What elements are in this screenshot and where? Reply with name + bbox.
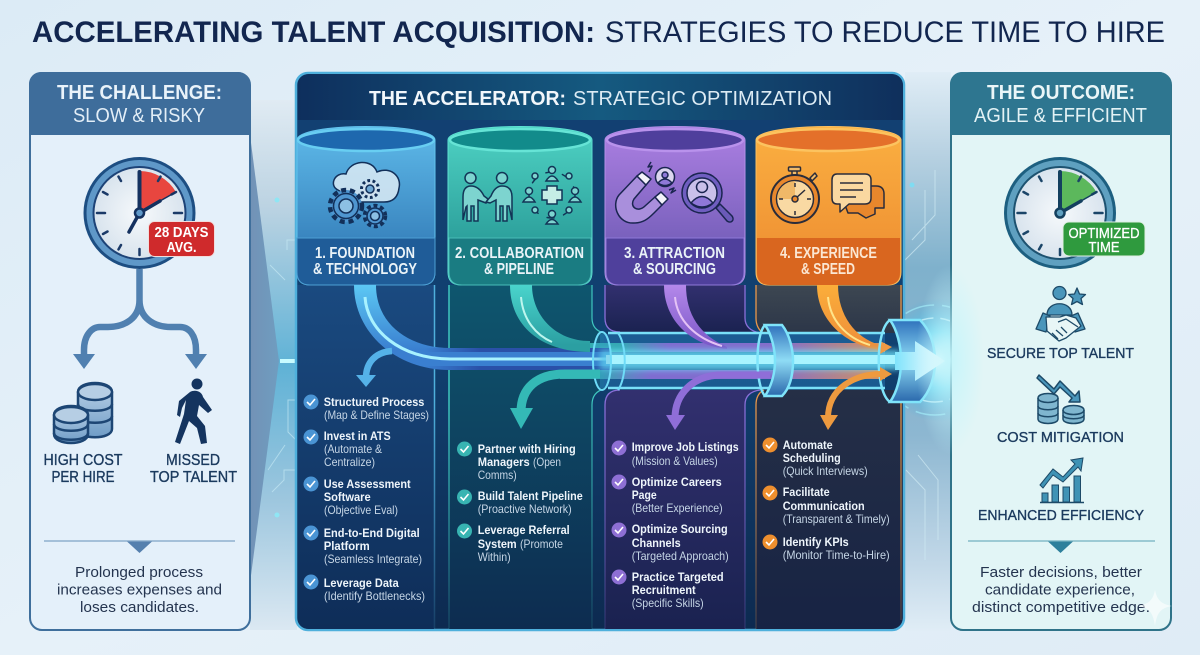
badge: optimized time: OPTIMIZED xyxy=(1068,226,1140,242)
item: structured process: (Map & Define Stages) xyxy=(324,408,429,422)
ring: blue middle xyxy=(758,325,793,396)
pipeline: streams merging into central pipe xyxy=(354,285,880,370)
arrow: orange upper xyxy=(880,341,892,354)
label: foundation and technology: & TECHNOLOGY xyxy=(313,261,418,278)
arrow: column 2 branch xyxy=(510,374,600,429)
stream: teal pipe from column 2 xyxy=(510,285,590,352)
heading: the accelerator xyxy=(369,88,832,110)
item: automate scheduling: (Quick Interviews) xyxy=(783,464,868,478)
item: structured process: Structured Process xyxy=(324,395,425,409)
icon: handshake with star xyxy=(1036,286,1086,341)
branch arrows to lists xyxy=(356,351,892,430)
label: attraction and sourcing xyxy=(624,245,725,278)
highlight: orange xyxy=(828,297,870,345)
icon: magnet and magnifier xyxy=(616,162,733,223)
summary: outcome: Faster decisions, better xyxy=(980,564,1142,581)
highlight: purple xyxy=(675,297,722,346)
central pipe body xyxy=(560,333,885,388)
column 2: collaboration and pipeline xyxy=(448,126,604,629)
item: automate scheduling xyxy=(762,438,868,478)
icon: stopwatch and chat bubbles xyxy=(771,167,884,223)
arrow: column 4 branch xyxy=(820,367,892,430)
item: leverage data xyxy=(304,574,425,603)
item: hiring managers: Partner with Hiring xyxy=(478,442,576,456)
label: high cost per hire xyxy=(44,452,123,486)
item: assessment software: (Objective Eval) xyxy=(324,503,398,517)
panel: the challenge xyxy=(29,72,250,630)
stream: orange taper from column 4 xyxy=(817,285,880,350)
item: digital platform xyxy=(304,526,422,566)
arrow: split into two consequences xyxy=(73,269,207,369)
heading: the outcome: AGILE & EFFICIENT xyxy=(974,105,1147,127)
item: job listings xyxy=(612,440,739,468)
item: facilitate communication: Facilitate xyxy=(783,485,830,499)
ring: translucent xyxy=(593,332,625,390)
badge: 28 days avg: 28 DAYS xyxy=(154,225,209,241)
item: facilitate communication: Communication xyxy=(783,499,865,513)
item: job listings: Improve Job Listings xyxy=(632,440,739,454)
icon: sparkle xyxy=(1138,590,1172,626)
item: invest in ATS xyxy=(304,429,391,469)
label: high cost per hire: PER HIRE xyxy=(52,469,114,486)
item: sourcing channels xyxy=(612,522,729,563)
label: missed top talent xyxy=(150,452,237,486)
item: talent pipeline: (Proactive Network) xyxy=(478,502,572,516)
item: hiring managers: Comms) xyxy=(478,468,517,482)
ring: large end collar xyxy=(879,320,935,402)
heading: the outcome xyxy=(974,82,1147,127)
item: facilitate communication xyxy=(762,485,890,526)
label: foundation and technology: 1. FOUNDATION xyxy=(315,245,415,262)
summary: challenge xyxy=(57,564,222,616)
item: hiring managers: (Open xyxy=(533,455,561,469)
icon: cloud and gears xyxy=(330,162,399,226)
item: careers page xyxy=(612,474,723,515)
item: digital platform: Platform xyxy=(324,539,370,553)
summary: challenge: increases expenses and xyxy=(57,582,222,598)
label: missed top talent: TOP TALENT xyxy=(150,469,237,486)
item: talent pipeline: Build Talent Pipeline xyxy=(478,489,583,503)
heading: the challenge xyxy=(57,82,222,127)
label: foundation and technology xyxy=(313,245,418,278)
icon: coin stacks xyxy=(54,383,112,443)
highlight: teal xyxy=(521,297,552,342)
label: secure top talent: SECURE TOP TALENT xyxy=(987,346,1134,362)
item: facilitate communication: (Transparent & Timely) xyxy=(783,512,890,526)
column 3: attraction and sourcing xyxy=(605,126,760,629)
badge: 28 days avg xyxy=(148,222,214,256)
list: column 3 items xyxy=(612,440,739,610)
item: targeted recruitment: Practice Targeted xyxy=(632,570,724,584)
item: referral system: Within) xyxy=(478,550,511,564)
panel: the outcome xyxy=(916,72,1172,630)
item: identify KPIs: (Monitor Time-to-Hire) xyxy=(783,548,890,562)
item: talent pipeline xyxy=(457,489,583,516)
badge: optimized time: TIME xyxy=(1088,240,1120,256)
item: leverage data: Leverage Data xyxy=(324,576,399,590)
item: automate scheduling: Automate xyxy=(783,438,833,452)
item: identify KPIs xyxy=(762,534,890,562)
stream: blue pipe from column 1 xyxy=(354,285,610,370)
heading: the challenge: THE CHALLENGE: xyxy=(57,82,222,104)
icon: falling cost xyxy=(1037,375,1084,424)
item: careers page: Page xyxy=(632,488,657,502)
item: identify KPIs: Identify KPIs xyxy=(783,535,849,549)
label: collaboration and pipeline: 2. COLLABORATION xyxy=(455,245,584,262)
item: sourcing channels: Optimize Sourcing xyxy=(632,522,728,536)
list: column 1 items xyxy=(304,394,429,603)
label: experience and speed: & SPEED xyxy=(801,261,855,278)
heading: the accelerator: THE ACCELERATOR: xyxy=(369,88,566,110)
item: digital platform: (Seamless Integrate) xyxy=(324,552,422,566)
item: targeted recruitment xyxy=(612,570,724,610)
label: missed top talent: MISSED xyxy=(166,452,220,469)
label: high cost per hire: HIGH COST xyxy=(44,452,123,469)
title xyxy=(32,16,1165,49)
central pipe core and rings xyxy=(593,320,945,402)
list: column 2 items xyxy=(457,442,583,564)
left connector beam xyxy=(250,100,297,630)
item: invest in ATS: (Automate & xyxy=(324,442,382,456)
icon: walking person leaving xyxy=(175,378,212,444)
item: referral system: (Promote xyxy=(520,537,563,551)
item: careers page: (Better Experience) xyxy=(632,501,723,515)
list: column 4 items xyxy=(762,438,890,562)
arrow: column 1 branch xyxy=(356,351,392,387)
item: targeted recruitment: Recruitment xyxy=(632,583,696,597)
item: referral system xyxy=(457,523,570,564)
arrow: column 3 branch xyxy=(666,375,770,430)
item: assessment software: Software xyxy=(324,490,371,504)
label: attraction and sourcing: 3. ATTRACTION xyxy=(624,245,725,262)
summary: outcome: distinct competitive edge. xyxy=(972,599,1150,616)
item: assessment software: Use Assessment xyxy=(324,477,411,491)
item: invest in ATS: Centralize) xyxy=(324,455,375,469)
label: cost mitigation: COST MITIGATION xyxy=(997,430,1124,446)
summary: challenge: Prolonged process xyxy=(75,564,203,581)
item: sourcing channels: (Targeted Approach) xyxy=(632,549,729,563)
item: assessment software xyxy=(304,476,411,517)
title: STRATEGIES TO REDUCE TIME TO HIRE xyxy=(605,16,1165,49)
item: job listings: (Mission & Values) xyxy=(632,454,718,468)
stream: purple taper from column 3 xyxy=(664,285,727,349)
summary: challenge: loses candidates. xyxy=(80,599,199,616)
item: leverage data: (Identify Bottlenecks) xyxy=(324,589,425,603)
column 4: experience and speed xyxy=(756,126,903,629)
arrow: white exit arrow xyxy=(895,341,945,381)
badge: optimized time xyxy=(1063,222,1145,256)
item: careers page: Optimize Careers xyxy=(632,475,722,489)
item: structured process xyxy=(304,394,429,422)
heading: the outcome: THE OUTCOME: xyxy=(987,82,1135,104)
label: attraction and sourcing: & SOURCING xyxy=(633,261,716,278)
right connector with portal xyxy=(878,72,1002,631)
item: hiring managers xyxy=(457,442,576,482)
label: experience and speed xyxy=(780,245,877,278)
label: experience and speed: 4. EXPERIENCE xyxy=(780,245,877,262)
item: targeted recruitment: (Specific Skills) xyxy=(632,596,704,610)
icon: handshake people and network xyxy=(463,166,581,224)
item: digital platform: End-to-End Digital xyxy=(324,526,420,540)
title: ACCELERATING TALENT ACQUISITION: xyxy=(32,16,595,49)
column 1: foundation and technology xyxy=(297,126,435,629)
item: sourcing channels: Channels xyxy=(632,536,681,550)
summary: outcome: candidate experience, xyxy=(985,582,1135,598)
panel: the accelerator xyxy=(296,72,1172,630)
summary: outcome xyxy=(972,564,1150,616)
item: automate scheduling: Scheduling xyxy=(783,451,841,465)
item: invest in ATS: Invest in ATS xyxy=(324,429,391,443)
item: hiring managers: Managers xyxy=(478,455,530,469)
item: referral system: System xyxy=(478,537,517,551)
heading: the accelerator: STRATEGIC OPTIMIZATION xyxy=(573,88,832,110)
badge: 28 days avg: AVG. xyxy=(166,240,196,256)
item: referral system: Leverage Referral xyxy=(478,523,570,537)
heading: the challenge: SLOW & RISKY xyxy=(73,105,205,127)
icon: clock with green wedge xyxy=(1004,157,1116,269)
label: collaboration and pipeline xyxy=(455,245,584,278)
icon: rising efficiency chart xyxy=(1040,458,1084,502)
icon: clock with red wedge xyxy=(84,157,196,269)
label: collaboration and pipeline: & PIPELINE xyxy=(484,261,554,278)
label: enhanced efficiency: ENHANCED EFFICIENCY xyxy=(978,508,1144,524)
